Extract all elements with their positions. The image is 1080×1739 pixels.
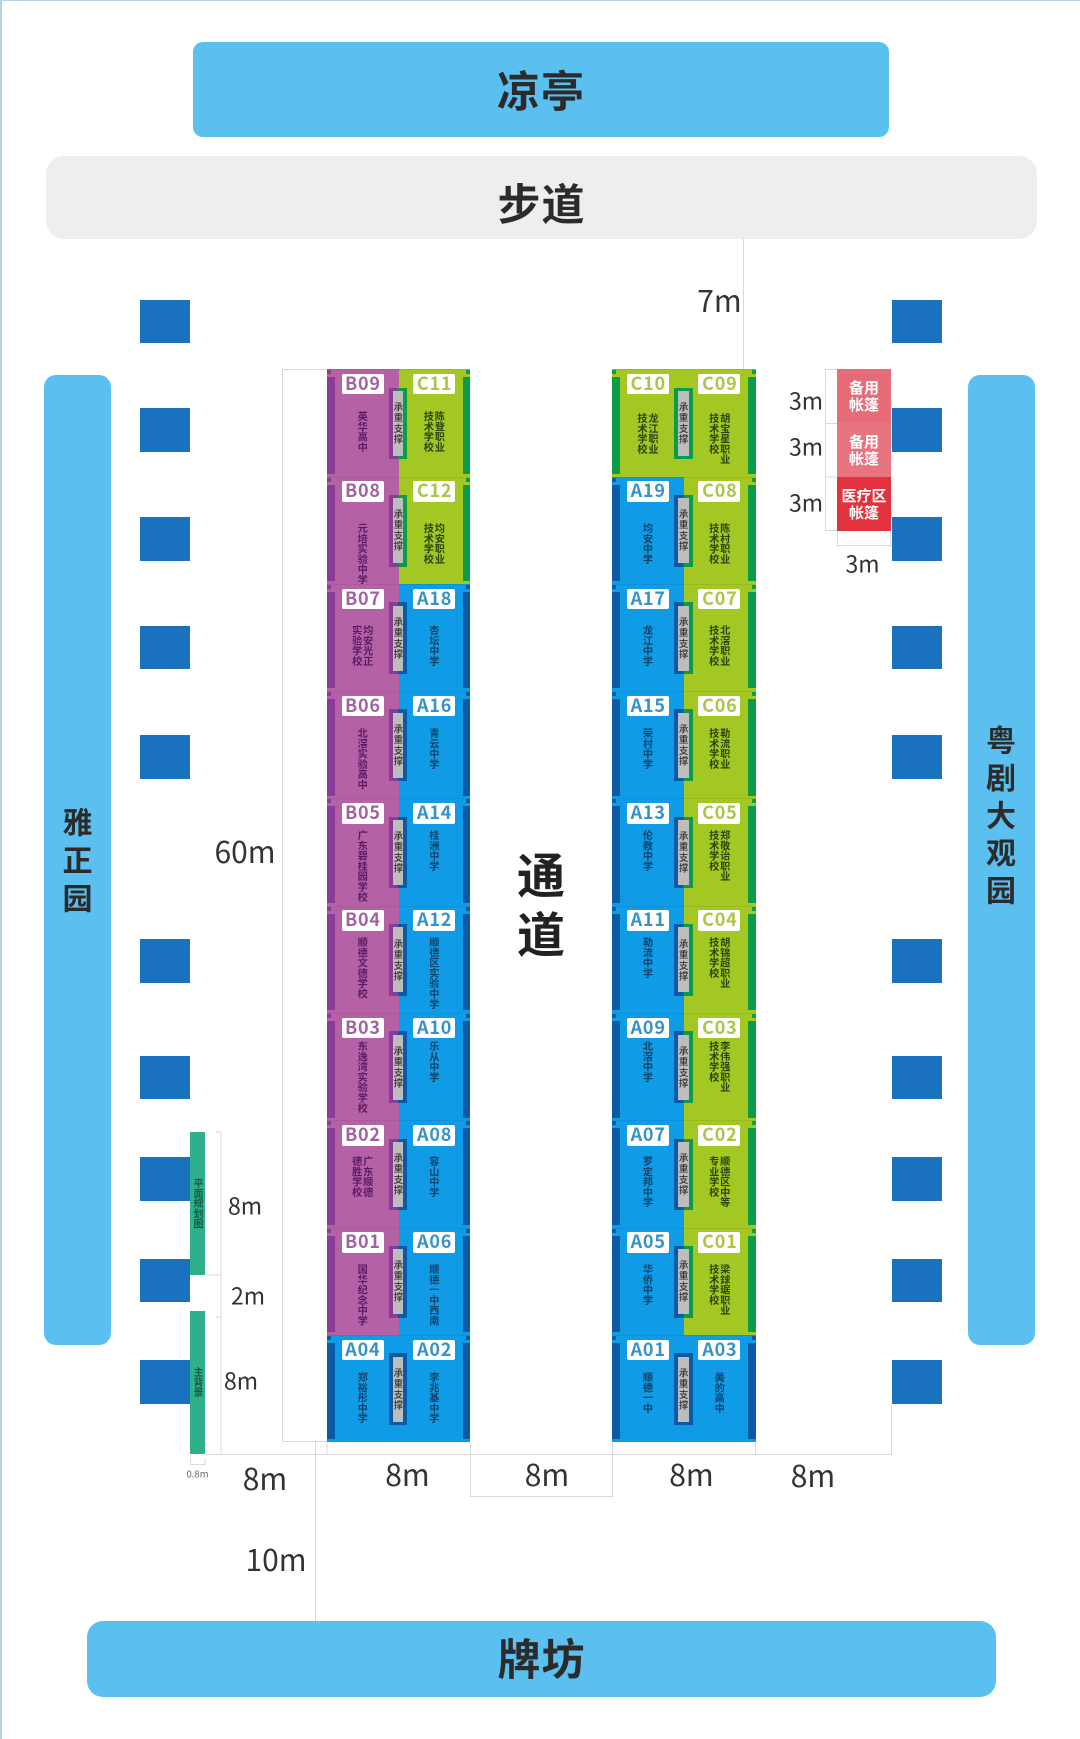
load-bearing support: 承重支撑 bbox=[677, 1368, 691, 1411]
stall C12: 均安职业 bbox=[432, 523, 447, 564]
load-bearing support bbox=[389, 388, 407, 459]
stall A15: 荣村中学 bbox=[640, 728, 655, 769]
row 6 bbox=[327, 906, 470, 1013]
right column of blue squares bbox=[892, 300, 942, 1404]
archway heading bar bbox=[87, 1621, 996, 1697]
stall B03 bbox=[327, 1013, 399, 1120]
site plan board bbox=[190, 1132, 205, 1275]
stall C06: 勒流职业 bbox=[718, 728, 733, 769]
stall C05 bbox=[684, 798, 756, 906]
stall A12: A12 bbox=[417, 906, 452, 932]
stall B06: B06 bbox=[345, 692, 381, 718]
stall B02 bbox=[327, 1120, 399, 1228]
row 10 bbox=[327, 1335, 470, 1442]
row 7 bbox=[327, 1013, 470, 1120]
row 2 bbox=[612, 477, 756, 584]
load-bearing support bbox=[389, 495, 407, 567]
dimension: 0.8m board depth: 0.8m bbox=[187, 1466, 208, 1480]
load-bearing support: 承重支撑 bbox=[391, 724, 405, 767]
stall A01 bbox=[612, 1335, 684, 1442]
stall B04: B04 bbox=[345, 906, 381, 932]
load-bearing support bbox=[674, 602, 693, 674]
stall C02 bbox=[684, 1120, 756, 1228]
stall B05: B05 bbox=[345, 799, 381, 825]
dimension: 3m tent 1: 3m bbox=[789, 382, 823, 416]
row 9 bbox=[612, 1228, 756, 1335]
stall A06 bbox=[399, 1228, 470, 1335]
load-bearing support bbox=[389, 1031, 407, 1103]
stall C07 bbox=[684, 584, 756, 691]
dimension: 3m tent width: 3m bbox=[845, 546, 880, 580]
stall A03: A03 bbox=[702, 1336, 737, 1362]
stall A13: A13 bbox=[631, 799, 666, 825]
load-bearing support: 承重支撑 bbox=[677, 724, 691, 767]
stall C05: 技术学校 bbox=[707, 830, 722, 872]
walkway heading bar bbox=[46, 156, 1037, 239]
stall C04 bbox=[684, 906, 756, 1013]
stall B02: B02 bbox=[345, 1121, 381, 1147]
dimension: 8m right block: 8m bbox=[669, 1451, 714, 1495]
stall C10: 技术学校 bbox=[635, 413, 650, 454]
stall A10: A10 bbox=[417, 1014, 452, 1040]
stall B03: 东逸湾实验学校 bbox=[355, 1041, 370, 1113]
load-bearing support: 承重支撑 bbox=[391, 1046, 405, 1089]
dimension: 8m backdrop: 8m bbox=[224, 1362, 258, 1396]
main backdrop board: 主背景 bbox=[191, 1367, 206, 1398]
stall C09: C09 bbox=[702, 370, 738, 396]
medical tent: 帐篷 bbox=[849, 502, 879, 523]
stall C10 bbox=[612, 369, 684, 477]
load-bearing support: 承重支撑 bbox=[677, 939, 691, 981]
load-bearing support: 承重支撑 bbox=[391, 402, 405, 445]
load-bearing support bbox=[389, 602, 407, 674]
stall C08 bbox=[684, 477, 756, 584]
load-bearing support: 承重支撑 bbox=[677, 1046, 691, 1089]
stall A12 bbox=[399, 906, 470, 1013]
stall C01: C01 bbox=[702, 1228, 738, 1254]
stall B06: 北滘实验高中 bbox=[355, 728, 370, 790]
load-bearing support bbox=[674, 709, 693, 781]
stall A19: 均安中学 bbox=[640, 523, 655, 564]
dimension: 3m tent 3: 3m bbox=[789, 484, 823, 518]
stall B07 bbox=[327, 584, 399, 691]
reserve tent 1: 备用 bbox=[849, 377, 879, 398]
archway heading bar: 牌坊 bbox=[498, 1626, 586, 1688]
stall C05: C05 bbox=[702, 799, 738, 825]
stall B02: 德胜学校 bbox=[350, 1156, 365, 1198]
row 8 bbox=[327, 1120, 470, 1228]
stall A03 bbox=[684, 1335, 756, 1442]
right booth block bbox=[612, 369, 756, 1442]
walkway heading bar: 步道 bbox=[498, 170, 586, 232]
stall A18: 杏坛中学 bbox=[427, 625, 442, 666]
left booth block bbox=[327, 369, 470, 1442]
reserve tent 2 bbox=[837, 423, 891, 477]
stall B01: B01 bbox=[345, 1228, 381, 1254]
left column of blue squares bbox=[140, 300, 190, 1404]
stall A14: A14 bbox=[417, 799, 452, 825]
load-bearing support: 承重支撑 bbox=[677, 1153, 691, 1196]
load-bearing support: 承重支撑 bbox=[677, 1260, 691, 1303]
stall B09: 英华高中 bbox=[355, 411, 370, 452]
stall A06: A06 bbox=[417, 1228, 452, 1254]
stall A02: 李兆基中学 bbox=[427, 1372, 442, 1423]
stall C05: 郑敬诒职业 bbox=[718, 830, 733, 882]
load-bearing support: 承重支撑 bbox=[391, 509, 405, 552]
stall C11: 技术学校 bbox=[421, 411, 436, 452]
stall A11 bbox=[612, 906, 684, 1013]
stall C03: 技术学校 bbox=[707, 1041, 722, 1082]
stall A09: A09 bbox=[631, 1014, 666, 1040]
stall C02: C02 bbox=[702, 1121, 738, 1147]
right side panel: Cantonese Opera Grand View Garden bbox=[968, 375, 1035, 1345]
stall C07: 北滘职业 bbox=[718, 625, 733, 666]
row 4 bbox=[327, 691, 470, 798]
dimension: 8m right margin: 8m bbox=[791, 1452, 835, 1496]
row 8 bbox=[612, 1120, 756, 1228]
stall A05 bbox=[612, 1228, 684, 1335]
load-bearing support: 承重支撑 bbox=[391, 1368, 405, 1411]
stall B09: B09 bbox=[345, 370, 381, 396]
stall C01 bbox=[684, 1228, 756, 1335]
left side panel: Yazheng Garden bbox=[44, 375, 111, 1345]
stall B09 bbox=[327, 369, 399, 477]
stall A17: 龙江中学 bbox=[640, 625, 655, 666]
stall A09 bbox=[612, 1013, 684, 1120]
stall B04 bbox=[327, 906, 399, 1013]
stall A08 bbox=[399, 1120, 470, 1228]
stall A10 bbox=[399, 1013, 470, 1120]
stall C12: C12 bbox=[417, 477, 452, 503]
reserve tent 1 bbox=[837, 369, 891, 423]
stall C11: C11 bbox=[417, 370, 452, 396]
dimension: 2m gap: 2m bbox=[231, 1278, 265, 1312]
stall A07: 罗定邦中学 bbox=[640, 1156, 655, 1208]
right side panel: Cantonese Opera Grand View Garden: 粤剧大观园 bbox=[979, 725, 1023, 912]
stall A03: 美的高中 bbox=[712, 1372, 727, 1413]
stall B08 bbox=[327, 477, 399, 584]
stall C06 bbox=[684, 691, 756, 798]
load-bearing support: 承重支撑 bbox=[391, 939, 405, 981]
reserve tent 2: 备用 bbox=[849, 431, 879, 452]
stall A07 bbox=[612, 1120, 684, 1228]
stall B01 bbox=[327, 1228, 399, 1335]
stall A17 bbox=[612, 584, 684, 691]
medical tent bbox=[837, 477, 891, 531]
stall A04: 郑裕彤中学 bbox=[355, 1372, 370, 1423]
stall B07: B07 bbox=[345, 585, 381, 611]
stall B08: 元培实验中学 bbox=[355, 523, 370, 584]
row 2 bbox=[327, 477, 470, 584]
stall A18: A18 bbox=[417, 585, 452, 611]
load-bearing support: 承重支撑 bbox=[677, 831, 691, 874]
stall C08: C08 bbox=[702, 477, 738, 503]
stall A19 bbox=[612, 477, 684, 584]
load-bearing support bbox=[674, 388, 693, 459]
stall C03: 李伟强职业 bbox=[718, 1041, 733, 1093]
stall A04: A04 bbox=[345, 1336, 380, 1362]
pavilion heading bar: 凉亭 bbox=[497, 58, 585, 120]
stall C06: C06 bbox=[702, 692, 738, 718]
stall C04: 技术学校 bbox=[707, 937, 722, 978]
stall A19: A19 bbox=[631, 477, 666, 503]
stall C03 bbox=[684, 1013, 756, 1120]
stall C04: 胡锦超职业 bbox=[718, 937, 733, 988]
load-bearing support bbox=[389, 709, 407, 781]
load-bearing support bbox=[389, 1246, 407, 1318]
row 9 bbox=[327, 1228, 470, 1335]
load-bearing support: 承重支撑 bbox=[391, 1153, 405, 1196]
stall C01: 技术学校 bbox=[707, 1264, 722, 1305]
site plan board: 平面规划图 bbox=[191, 1178, 206, 1229]
load-bearing support bbox=[389, 1139, 407, 1210]
stall A18 bbox=[399, 584, 470, 691]
row 7 bbox=[612, 1013, 756, 1120]
stall A11: A11 bbox=[631, 906, 666, 932]
stall A16: A16 bbox=[417, 692, 452, 718]
stall C09 bbox=[684, 369, 756, 477]
stall C08: 技术学校 bbox=[707, 523, 722, 564]
stall A15 bbox=[612, 691, 684, 798]
load-bearing support: 承重支撑 bbox=[391, 831, 405, 874]
stall C04: C04 bbox=[702, 906, 738, 932]
stall B04: 顺德文德学校 bbox=[355, 937, 370, 999]
stall A17: A17 bbox=[631, 585, 666, 611]
stall A16 bbox=[399, 691, 470, 798]
load-bearing support: 承重支撑 bbox=[391, 1260, 405, 1303]
stall A06: 顺德一中西南 bbox=[427, 1264, 442, 1326]
stall C02: 顺德区中等 bbox=[718, 1156, 733, 1208]
stall A09: 北滘中学 bbox=[640, 1041, 655, 1082]
stall A16: 青云中学 bbox=[427, 728, 442, 769]
stall C09: 技术学校 bbox=[707, 413, 722, 454]
load-bearing support: 承重支撑 bbox=[391, 617, 405, 659]
stall A08: A08 bbox=[417, 1121, 452, 1147]
stall C08: 陈村职业 bbox=[718, 523, 733, 564]
stall A05: A05 bbox=[631, 1228, 666, 1254]
load-bearing support: 承重支撑 bbox=[677, 509, 691, 552]
stall C09: 胡宝星职业 bbox=[718, 413, 733, 465]
stall A13: 伦教中学 bbox=[640, 830, 655, 872]
stall C07: 技术学校 bbox=[707, 625, 722, 666]
dimension: 3m tent 2: 3m bbox=[789, 428, 823, 462]
stall C10: C10 bbox=[630, 370, 666, 396]
stall C11 bbox=[399, 369, 470, 477]
dimension: 8m aisle: 8m bbox=[525, 1451, 569, 1495]
stall C07: C07 bbox=[702, 585, 738, 611]
load-bearing support bbox=[674, 495, 693, 567]
row 5 bbox=[327, 798, 470, 906]
load-bearing support bbox=[389, 1353, 407, 1425]
dimension: 8m left block: 8m bbox=[385, 1451, 430, 1495]
stall A02: A02 bbox=[417, 1336, 452, 1362]
stall B05 bbox=[327, 798, 399, 906]
left side panel: Yazheng Garden: 雅正园 bbox=[56, 807, 100, 921]
stall C02: 专业学校 bbox=[707, 1156, 722, 1198]
stall A13 bbox=[612, 798, 684, 906]
stall A02 bbox=[399, 1335, 470, 1442]
stall B07: 实验学校 bbox=[350, 625, 365, 666]
row 6 bbox=[612, 906, 756, 1013]
stall C03: C03 bbox=[702, 1014, 738, 1040]
central aisle label: 通道 bbox=[506, 851, 576, 969]
stall B02: 广东顺德 bbox=[361, 1156, 376, 1198]
row 5 bbox=[612, 798, 756, 906]
row 3 bbox=[327, 584, 470, 691]
dimension: 8m site plan board: 8m bbox=[228, 1188, 262, 1222]
row 10 bbox=[612, 1335, 756, 1442]
stall C12: 技术学校 bbox=[421, 523, 436, 564]
stall C06: 技术学校 bbox=[707, 728, 722, 769]
stall C12 bbox=[399, 477, 470, 584]
load-bearing support bbox=[389, 817, 407, 888]
row 1 bbox=[612, 369, 756, 477]
main backdrop board bbox=[190, 1311, 205, 1454]
stall B01: 国华纪念中学 bbox=[355, 1264, 370, 1326]
load-bearing support bbox=[674, 1139, 693, 1210]
stall B06 bbox=[327, 691, 399, 798]
row 1 bbox=[327, 369, 470, 477]
row 3 bbox=[612, 584, 756, 691]
load-bearing support bbox=[674, 924, 693, 996]
stall A04 bbox=[327, 1335, 399, 1442]
stall A07: A07 bbox=[631, 1121, 666, 1147]
dimension: 60m: 60m bbox=[214, 828, 276, 872]
stall A05: 华侨中学 bbox=[640, 1264, 655, 1305]
load-bearing support bbox=[674, 817, 693, 888]
load-bearing support bbox=[674, 1353, 693, 1425]
dimension: 10m: 10m bbox=[245, 1536, 307, 1580]
stall B08: B08 bbox=[345, 477, 381, 503]
dimension: 7m: 7m bbox=[697, 277, 742, 321]
stall A14: 桂洲中学 bbox=[427, 830, 442, 872]
stall A01: A01 bbox=[631, 1336, 666, 1362]
stall C10: 龙江职业 bbox=[646, 413, 661, 454]
stall C11: 陈登职业 bbox=[432, 411, 447, 452]
dimension: 8m left margin: 8m bbox=[243, 1455, 287, 1499]
load-bearing support bbox=[674, 1246, 693, 1318]
load-bearing support bbox=[389, 924, 407, 996]
reserve tent 2: 帐篷 bbox=[849, 448, 879, 469]
stall B05: 广东碧桂园学校 bbox=[355, 830, 370, 903]
load-bearing support: 承重支撑 bbox=[677, 402, 691, 445]
stall A10: 乐从中学 bbox=[427, 1041, 442, 1082]
reserve tent 1: 帐篷 bbox=[849, 394, 879, 415]
row 4 bbox=[612, 691, 756, 798]
stall A08: 容山中学 bbox=[427, 1156, 442, 1198]
stall A14 bbox=[399, 798, 470, 906]
stall B07: 均安光正 bbox=[361, 625, 376, 666]
load-bearing support: 承重支撑 bbox=[677, 617, 691, 659]
pavilion heading bar bbox=[193, 42, 889, 137]
stall B03: B03 bbox=[345, 1014, 381, 1040]
medical tent: 医疗区 bbox=[841, 485, 886, 506]
stall A12: 顺德区实验中学 bbox=[427, 937, 442, 1009]
stall C01: 梁銶琚职业 bbox=[718, 1264, 733, 1315]
stall A15: A15 bbox=[631, 692, 666, 718]
load-bearing support bbox=[674, 1031, 693, 1103]
stall A11: 勒流中学 bbox=[640, 937, 655, 978]
stall A01: 顺德一中 bbox=[640, 1372, 655, 1413]
